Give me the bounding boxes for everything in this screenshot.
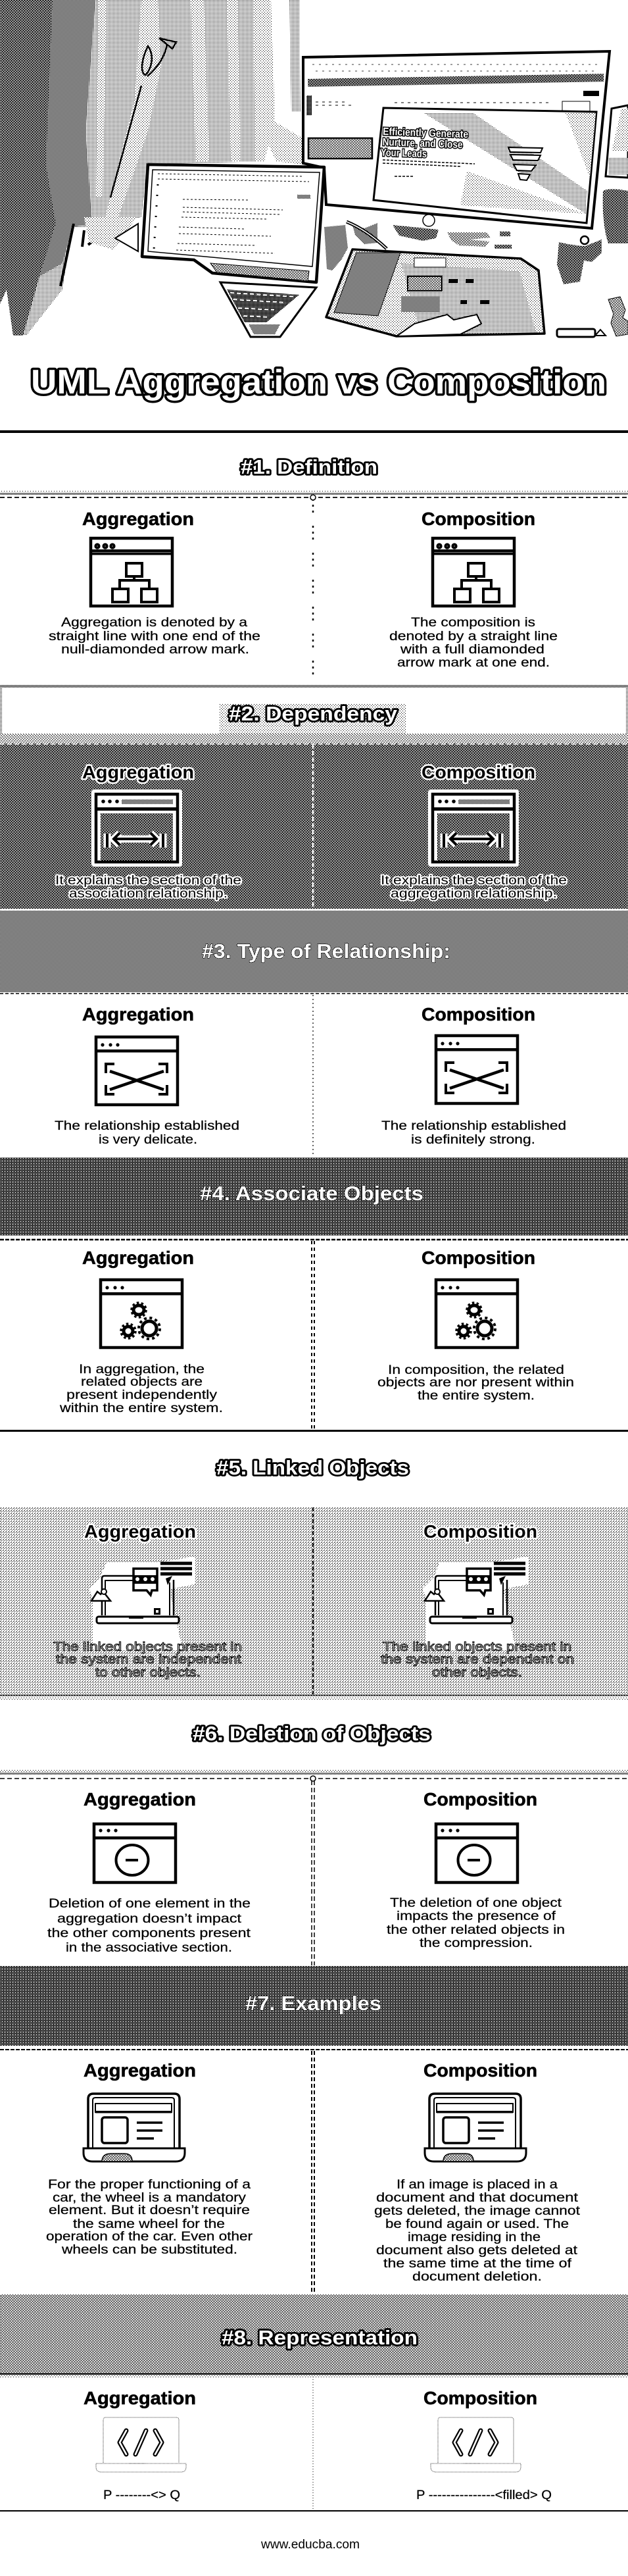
curtain — [0, 0, 302, 336]
keyboard — [220, 282, 316, 337]
description: is definitely strong. — [411, 1133, 535, 1147]
heading: #6. Deletion of Objects — [193, 1722, 431, 1745]
column: Composition: Composition — [423, 1789, 537, 1809]
column: Composition — [387, 1789, 565, 1950]
column: Composition — [381, 762, 567, 901]
description — [55, 1119, 239, 1147]
icon: hierarchy window — [91, 538, 172, 606]
description: present independently — [66, 1388, 218, 1402]
description: In aggregation, the — [79, 1363, 205, 1376]
icon: code laptop — [431, 2417, 521, 2472]
description — [387, 1896, 565, 1950]
column: Aggregation — [59, 1248, 223, 1415]
heading band: #4. Associate Objects — [200, 1182, 423, 1205]
icon: gears window — [436, 1280, 518, 1348]
textured body — [0, 1507, 628, 1694]
icon: expand window — [436, 1036, 518, 1103]
description: in the associative section. — [66, 1941, 232, 1955]
items under monitor — [324, 222, 512, 270]
column: Composition — [374, 2060, 581, 2284]
description: operation of the car. Even other — [46, 2230, 253, 2244]
headline in screenshot — [381, 126, 468, 161]
description: The relationship established — [55, 1119, 239, 1133]
heading: #5. Linked Objects — [216, 1456, 409, 1479]
panel: #4 Associate Objects — [0, 1157, 628, 1429]
description — [377, 1363, 574, 1403]
column: Aggregation — [84, 2388, 196, 2502]
column: Aggregation: Aggregation — [82, 1004, 194, 1024]
description — [53, 1640, 242, 1680]
panel: #1 Definition — [0, 455, 628, 684]
panel: #2 Dependency — [0, 685, 628, 909]
footer url: www.educba.com — [260, 2538, 360, 2552]
description — [49, 616, 260, 657]
description: other objects. — [432, 1666, 522, 1680]
description: aggregation relationship. — [391, 887, 557, 901]
heading band: #3. Type of Relationship: — [202, 940, 450, 963]
column: Aggregation — [46, 2060, 253, 2257]
column: Aggregation: Aggregation — [84, 1521, 196, 1542]
formula: P --------<> Q — [103, 2488, 180, 2502]
description: It explains the section of the — [381, 874, 567, 888]
heading band: #2. Dependency — [229, 702, 398, 725]
description — [389, 616, 558, 670]
icon: hierarchy window — [433, 538, 514, 606]
heading band: #7. Examples — [245, 1992, 381, 2015]
heading: Definition: #1. Definition — [241, 455, 377, 478]
description: In composition, the related — [388, 1363, 564, 1377]
description: arrow mark at one end. — [397, 656, 550, 670]
description: image residing in the — [408, 2231, 541, 2244]
icon: arrow window — [428, 790, 519, 867]
column: Aggregation: Aggregation — [82, 1248, 194, 1268]
column: Aggregation — [47, 1789, 251, 1955]
column: Aggregation: Aggregation — [84, 2388, 196, 2408]
panel: #5 Linked Objects — [0, 1456, 628, 1694]
description: related objects are — [81, 1375, 203, 1389]
description: document also gets deleted at — [376, 2244, 578, 2258]
column: Composition — [377, 1248, 574, 1403]
description: the entire system. — [418, 1389, 535, 1403]
column: Composition: Composition — [422, 1248, 535, 1268]
icon: minus window — [436, 1824, 518, 1882]
column: Aggregation — [55, 762, 241, 901]
column: Composition: Composition — [422, 1004, 535, 1024]
description: the same wheel for the — [73, 2217, 225, 2231]
icon: laptop with document — [84, 2094, 185, 2161]
description: car, the wheel is a mandatory — [53, 2191, 247, 2205]
panel: #3 Type of Relationship — [0, 911, 628, 1157]
heading band — [0, 911, 628, 992]
funnel — [508, 147, 543, 180]
column: Composition: Composition — [423, 2060, 537, 2081]
description — [381, 874, 567, 901]
hand — [397, 315, 481, 336]
description: to other objects. — [95, 1666, 201, 1680]
description: be found again or used. The — [385, 2217, 569, 2231]
headline in screenshot: Efficiently Generate — [383, 126, 468, 140]
description: wheels can be substituted. — [61, 2243, 237, 2257]
description: the compression. — [420, 1936, 533, 1950]
column: Composition — [381, 1521, 574, 1680]
heading band — [0, 1966, 628, 2046]
icon: minus window — [94, 1824, 176, 1882]
description — [374, 2178, 581, 2284]
formula: P ---------------<filled> Q — [416, 2488, 552, 2502]
column: Aggregation — [49, 509, 260, 657]
headline in screenshot: Your Leads — [381, 147, 427, 160]
description: the system are independent — [56, 1653, 242, 1667]
icon: gears window — [101, 1280, 182, 1348]
column: Composition: Composition — [422, 762, 535, 782]
description: association relationship. — [69, 887, 228, 901]
hp logo — [423, 215, 435, 226]
laptop on desk — [326, 249, 544, 336]
description: The deletion of one object — [390, 1896, 562, 1910]
description: It explains the section of the — [55, 874, 241, 888]
description: denoted by a straight line — [389, 630, 558, 644]
description — [47, 1897, 251, 1955]
description: null-diamonded arrow mark. — [61, 643, 249, 657]
description: with a full diamonded — [400, 643, 544, 657]
description: straight line with one end of the — [49, 630, 260, 644]
description: the other components present — [47, 1927, 251, 1940]
column: Aggregation: Aggregation — [84, 2060, 196, 2081]
description: gets deleted, the image cannot — [374, 2204, 581, 2218]
description: aggregation doesn’t impact — [57, 1912, 242, 1926]
icon: arrow window — [91, 790, 182, 867]
panel: #8 Representation — [0, 2294, 628, 2510]
dark body — [0, 744, 628, 909]
panel: #7 Examples — [0, 1966, 628, 2293]
description: Deletion of one element in the — [49, 1897, 251, 1911]
description: the other related objects in — [387, 1923, 565, 1937]
column: Composition: Composition — [423, 2388, 537, 2408]
description — [381, 1640, 574, 1680]
heading band: #8. Representation — [222, 2326, 418, 2349]
description: the same time at the time of — [383, 2257, 572, 2271]
icon: laptop with chat — [425, 1559, 527, 1648]
description — [55, 874, 241, 901]
description: The linked objects present in — [53, 1640, 242, 1654]
description: impacts the presence of — [397, 1909, 556, 1923]
description: the system are dependent on — [381, 1653, 574, 1667]
heading band — [0, 2294, 628, 2374]
icon: code laptop — [96, 2417, 186, 2472]
right side screen and objects — [557, 105, 628, 337]
glasses on curtain — [110, 38, 176, 197]
column: Aggregation: Aggregation — [84, 1789, 196, 1809]
description: document and that document — [376, 2191, 579, 2205]
column: Aggregation — [53, 1521, 242, 1680]
description: element. But it doesn’t require — [49, 2204, 250, 2217]
top rule — [0, 430, 628, 433]
column: Aggregation: Aggregation — [82, 762, 194, 782]
heading band — [0, 1157, 628, 1236]
description — [59, 1363, 223, 1415]
column: Aggregation: Aggregation — [82, 509, 194, 529]
icon: laptop with document — [425, 2094, 526, 2161]
description: The linked objects present in — [383, 1640, 571, 1654]
description: is very delicate. — [99, 1133, 197, 1147]
description: The relationship established — [381, 1119, 566, 1133]
column: Composition — [416, 2388, 552, 2502]
title: UML Aggregation vs Composition — [31, 363, 606, 401]
column: Composition: Composition — [423, 1521, 537, 1542]
description: For the proper functioning of a — [48, 2178, 251, 2192]
description: within the entire system. — [59, 1402, 223, 1415]
column: Composition — [389, 509, 558, 670]
description — [381, 1119, 566, 1147]
tablet — [142, 164, 324, 282]
main monitor — [303, 51, 610, 228]
description — [46, 2178, 253, 2257]
description: objects are nor present within — [377, 1376, 574, 1390]
description: Aggregation is denoted by a — [61, 616, 248, 630]
description: If an image is placed in a — [397, 2178, 558, 2192]
headline in screenshot: Nurture, and Close — [382, 137, 463, 151]
icon: expand window — [96, 1037, 178, 1105]
heading band — [0, 685, 628, 744]
column: Composition: Composition — [422, 509, 535, 529]
hero photo: desk with monitor, tablet, laptop and curtain — [0, 0, 628, 337]
website hero panel — [374, 108, 596, 223]
column: Aggregation — [55, 1004, 239, 1147]
panel: #6 Deletion of Objects — [0, 1722, 628, 1965]
icon: laptop with chat — [91, 1559, 193, 1648]
description: The composition is — [411, 616, 535, 630]
column: Composition — [381, 1004, 566, 1147]
description: document deletion. — [412, 2270, 542, 2284]
